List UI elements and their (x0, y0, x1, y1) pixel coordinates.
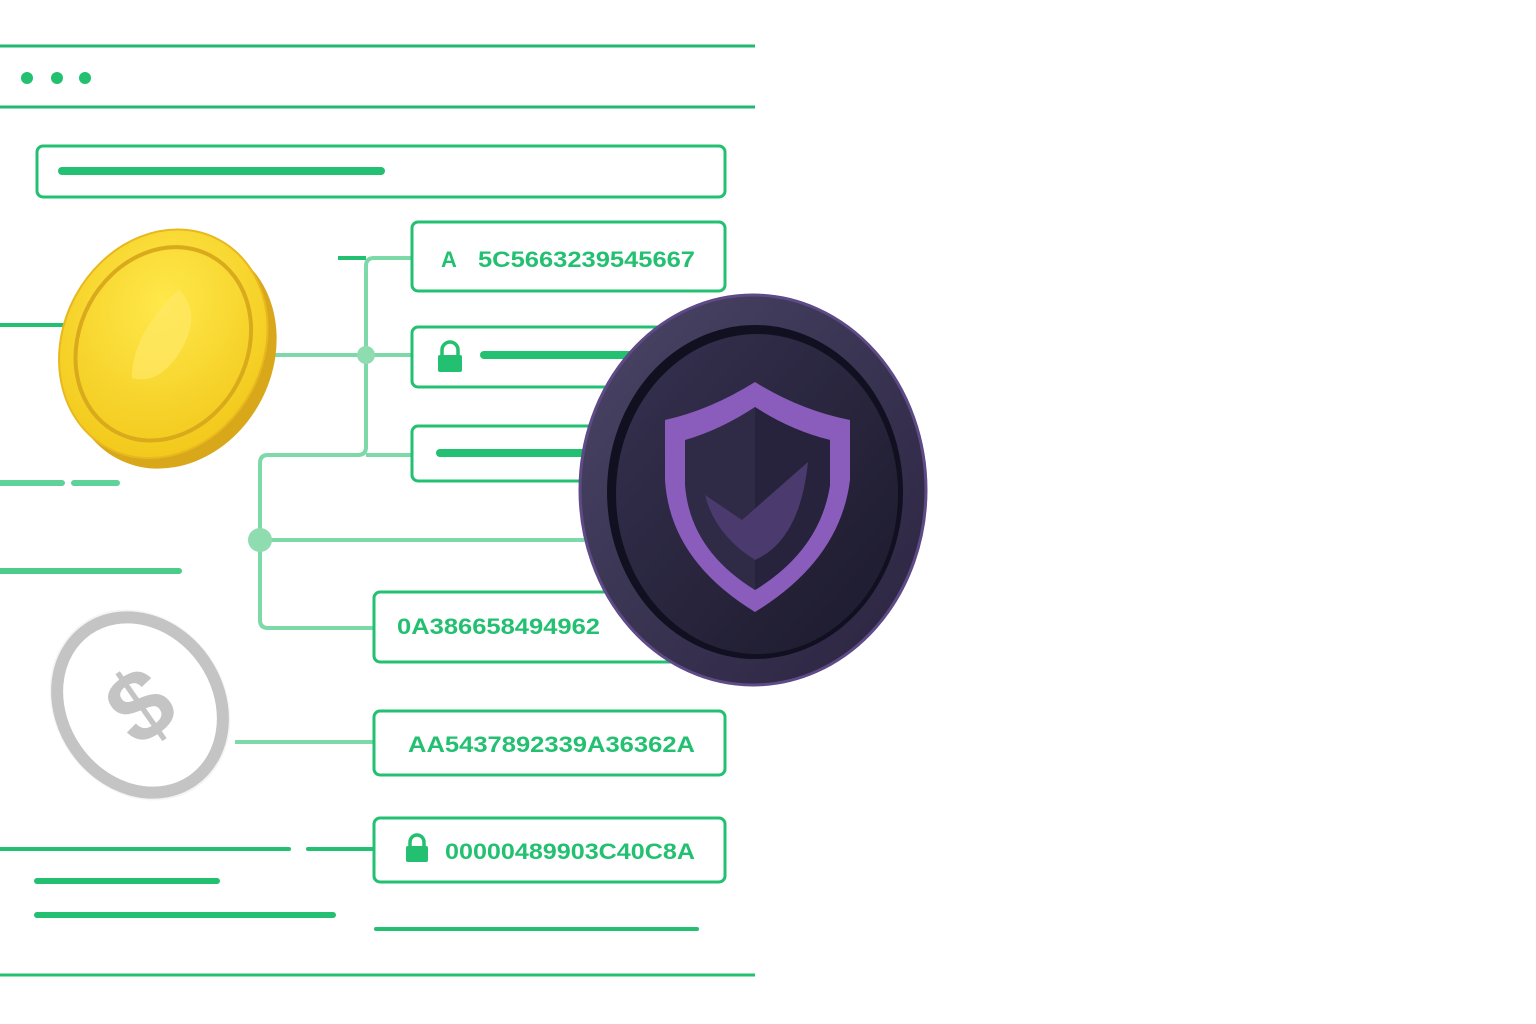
box: address A: 5C5663239545667 (478, 247, 695, 272)
box: 0A address (374, 592, 704, 662)
connector lines (0, 258, 600, 742)
shield (665, 382, 850, 612)
icon: silver dollar coin: $ (86, 644, 195, 768)
box: AA address (374, 711, 725, 775)
box: field 3 (412, 426, 712, 481)
box: locked field (412, 327, 712, 387)
box: AA address: AA5437892339A36362A (408, 732, 695, 757)
box: address A (412, 222, 725, 291)
decorative left text lines (0, 483, 755, 975)
box: address A: A (441, 247, 457, 272)
box: locked address (374, 818, 725, 882)
icon: gold coin (17, 193, 318, 505)
icon: silver dollar coin (13, 574, 267, 836)
icon: purple shield coin (580, 295, 926, 685)
search bar (37, 146, 725, 197)
box: locked address: 00000489903C40C8A (445, 839, 695, 864)
box: 0A address: 0A386658494962 (397, 614, 600, 639)
browser frame top (0, 46, 755, 107)
